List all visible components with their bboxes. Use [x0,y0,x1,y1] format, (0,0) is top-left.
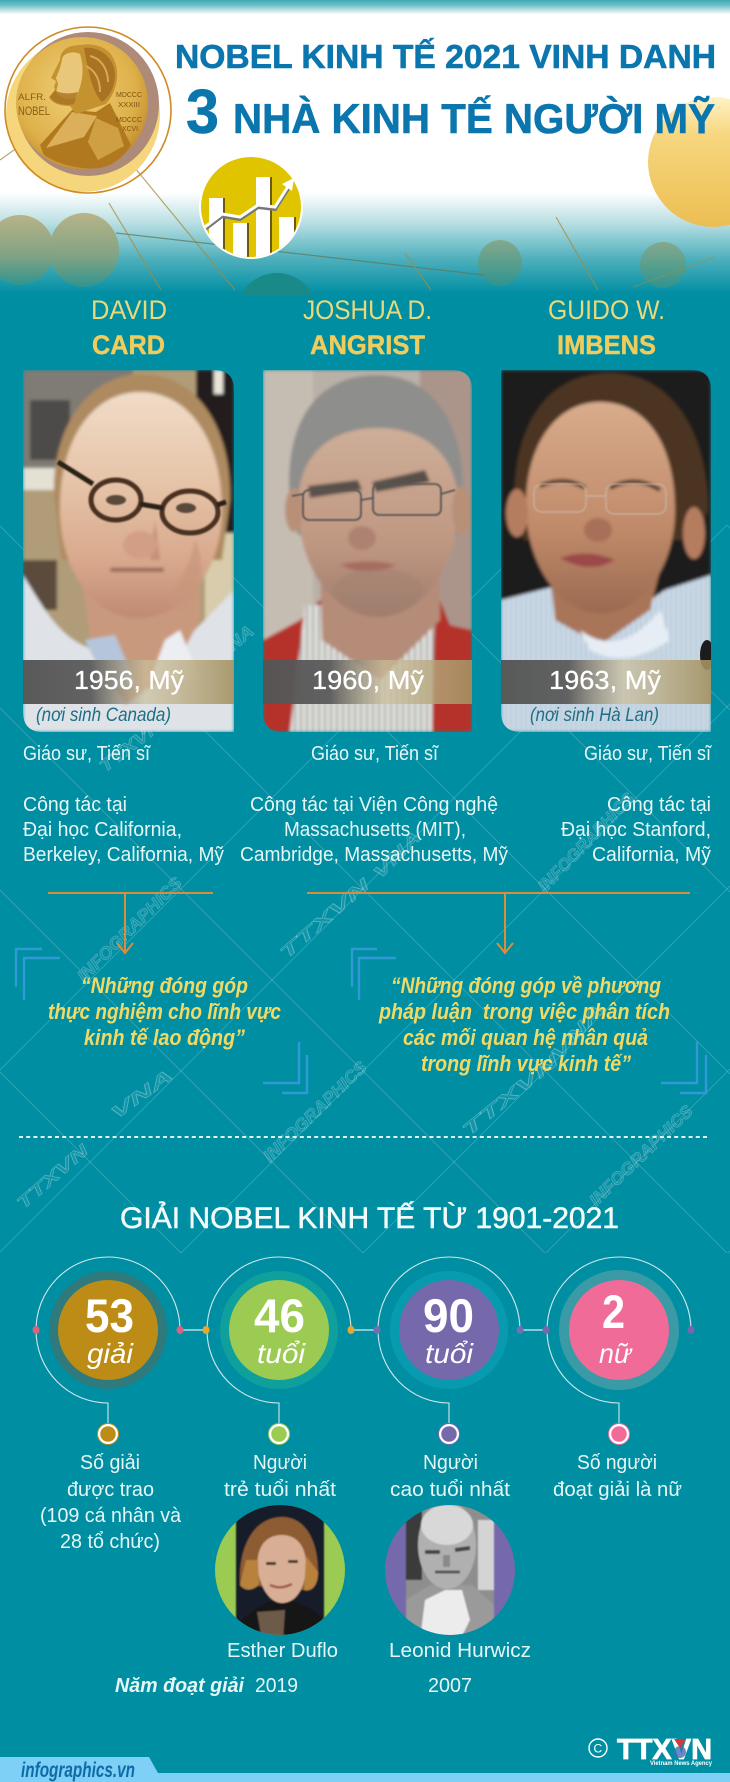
footer band: infographics.vn [21,1759,135,1782]
callout: Angrist and Imbens citation: “Những đóng góp về phương [391,973,661,998]
name: ANGRIST [310,330,425,360]
degree: Giáo sư, Tiến sĩ [23,743,151,765]
affiliation: Berkeley, California, Mỹ [23,844,224,866]
stat: oldest 90 [374,1257,524,1501]
degree: Giáo sư, Tiến sĩ [311,743,439,765]
stat: oldest 90: tuổi [425,1338,474,1369]
watermark text: INFOGRAPHICS [260,1057,371,1166]
name [303,295,432,360]
stat: 53 prizes: Số giải [80,1452,140,1474]
affiliation: Công tác tại [23,794,127,816]
watermark text: TTXVN [459,1050,563,1140]
name: IMBENS [557,330,656,360]
affiliation: Đại học California, [23,819,182,841]
birthplace note: (nơi sinh Hà Lan) [530,705,659,726]
watermark text: INFOGRAPHICS [534,789,639,896]
icon: rising bar chart [199,155,303,263]
watermark text: INFOGRAPHICS [586,1101,697,1210]
watermark text: TTXVN [130,680,197,740]
arrow: Angrist and Imbens to citation [307,893,690,953]
watermark text: VNA [213,622,258,663]
callout: Angrist and Imbens citation: trong lĩnh vực kinh tế” [421,1051,631,1076]
affiliation: Công tác tại [607,794,711,816]
stat: 2 women: nữ [599,1338,633,1369]
name: JOSHUA D. [303,295,432,325]
watermark text: VNA [107,1066,177,1123]
stat: 53 prizes: 53 [85,1289,134,1342]
stat: 2 women [542,1257,694,1501]
label: Esther Duflo: Esther Duflo [227,1640,338,1662]
label: Leonid Hurwicz: Leonid Hurwicz [389,1640,531,1662]
watermark text: INFOGRAPHICS [353,608,458,706]
affiliation [561,794,711,866]
stat: youngest 46: 46 [254,1289,305,1342]
stat: oldest 90: 90 [423,1289,474,1342]
panel: Guido W. Imbens [501,295,714,866]
icon: Nobel medal: XCVI [122,124,138,133]
footer band [0,1757,730,1782]
callout: Card citation: “Những đóng góp [81,973,248,998]
watermark text: VNA [547,1000,608,1065]
decorative lattice watermark [0,525,730,1254]
portrait: Leonid Hurwicz [385,1500,515,1640]
affiliation [240,794,508,866]
affiliation: Công tác tại Viện Công nghệ [250,794,498,816]
birth year band: 1963, Mỹ [549,665,661,695]
watermark text: VNA [369,827,425,883]
callout: Angrist and Imbens citation [352,949,706,1093]
stat: youngest 46: Người [253,1452,307,1474]
icon: Nobel medal: MDCCC [116,90,143,99]
icon: Nobel medal [5,27,171,193]
medal bust [40,44,131,168]
title [175,38,716,147]
stat: 53 prizes [32,1257,184,1553]
name [91,295,167,360]
birth year band [501,660,711,704]
arrow: Card to citation [48,893,213,953]
affiliation [23,794,224,866]
icon: Nobel medal: MDCCC [116,115,143,124]
stat: 53 prizes: được trao [67,1479,154,1501]
stat: youngest 46 [202,1257,354,1501]
affiliation: California, Mỹ [592,844,711,866]
watermark text [13,549,697,1213]
stat: 53 prizes: 28 tổ chức) [60,1531,160,1553]
affiliation: Đại học Stanford, [561,819,711,841]
birth year band: 1956, Mỹ [74,665,184,695]
award year row: 2019 [255,1675,298,1697]
header decoration: gold discs and thin lines [0,97,730,296]
logo: TTXVN: TTXVN [617,1734,712,1766]
watermark text: TTXVN [276,874,374,963]
name: DAVID [91,295,167,325]
watermark text: TTXVN [13,1140,93,1213]
icon: Nobel medal: NOBEL [18,104,50,118]
name [548,295,665,360]
stat: oldest 90: cao tuổi nhất [390,1479,510,1501]
stat: 2 women: Số người [577,1452,657,1474]
icon: Nobel medal: XXXIII [118,100,140,109]
callout: Card citation: kinh tế lao động” [84,1025,245,1050]
title: NOBEL KINH TẾ 2021 VINH DANH [175,38,716,75]
portrait: Esther Duflo [215,1500,345,1640]
heading: stats: GIẢI NOBEL KINH TẾ TỪ 1901-2021 [120,1201,619,1235]
stat: oldest 90: Người [423,1452,478,1474]
icon: Nobel medal: ALFR. [18,92,46,102]
affiliation: Cambridge, Massachusetts, Mỹ [240,844,508,866]
award year row [115,1675,472,1697]
stat: 53 prizes: giải [87,1338,134,1369]
title: 3 [186,78,219,147]
photo: David Card [23,370,234,732]
stat: youngest 46: trẻ tuổi nhất [224,1479,336,1501]
watermark text: INFOGRAPHICS [73,873,186,986]
photo: Guido Imbens [501,370,714,732]
logo: TTXVN: Vietnam News Agency [650,1761,713,1767]
watermark text: TTXVN [543,609,626,696]
stat: 2 women: 2 [602,1285,625,1338]
stat: 53 prizes: (109 cá nhân và [40,1505,182,1527]
callout: Angrist and Imbens citation: các mối quan hệ nhân quả [403,1025,648,1050]
stat: youngest 46: tuổi [257,1338,306,1369]
title: NHÀ KINH TẾ NGƯỜI MỸ [233,94,715,142]
callout: Card citation: thực nghiệm cho lĩnh vực [48,999,281,1024]
watermark text: TTXVN [96,715,167,776]
degree: Giáo sư, Tiến sĩ [584,743,712,765]
birth year band [263,660,472,704]
birth year band: 1960, Mỹ [312,665,424,695]
name: CARD [92,330,165,360]
stat: 2 women: đoạt giải là nữ [553,1479,682,1501]
watermark text: INFOGRAPHICS [37,561,144,663]
award year row: Năm đoạt giải [115,1675,244,1697]
name: GUIDO W. [548,295,665,325]
callout: Card citation [16,949,307,1093]
birth year band [23,660,234,704]
logo: TTXVN: C [594,1742,602,1756]
award year row: 2007 [428,1675,472,1697]
callout: Angrist and Imbens citation: pháp luận trong việc phân tích [378,999,670,1024]
watermark text: VNA [632,549,695,606]
panel: David Card [23,295,234,866]
panel: Joshua D. Angrist [240,295,508,866]
affiliation: Massachusetts (MIT), [284,819,466,841]
connectors between stat rings [180,1329,546,1331]
birthplace note: (nơi sinh Canada) [36,705,171,726]
photo: Joshua Angrist [263,370,472,732]
